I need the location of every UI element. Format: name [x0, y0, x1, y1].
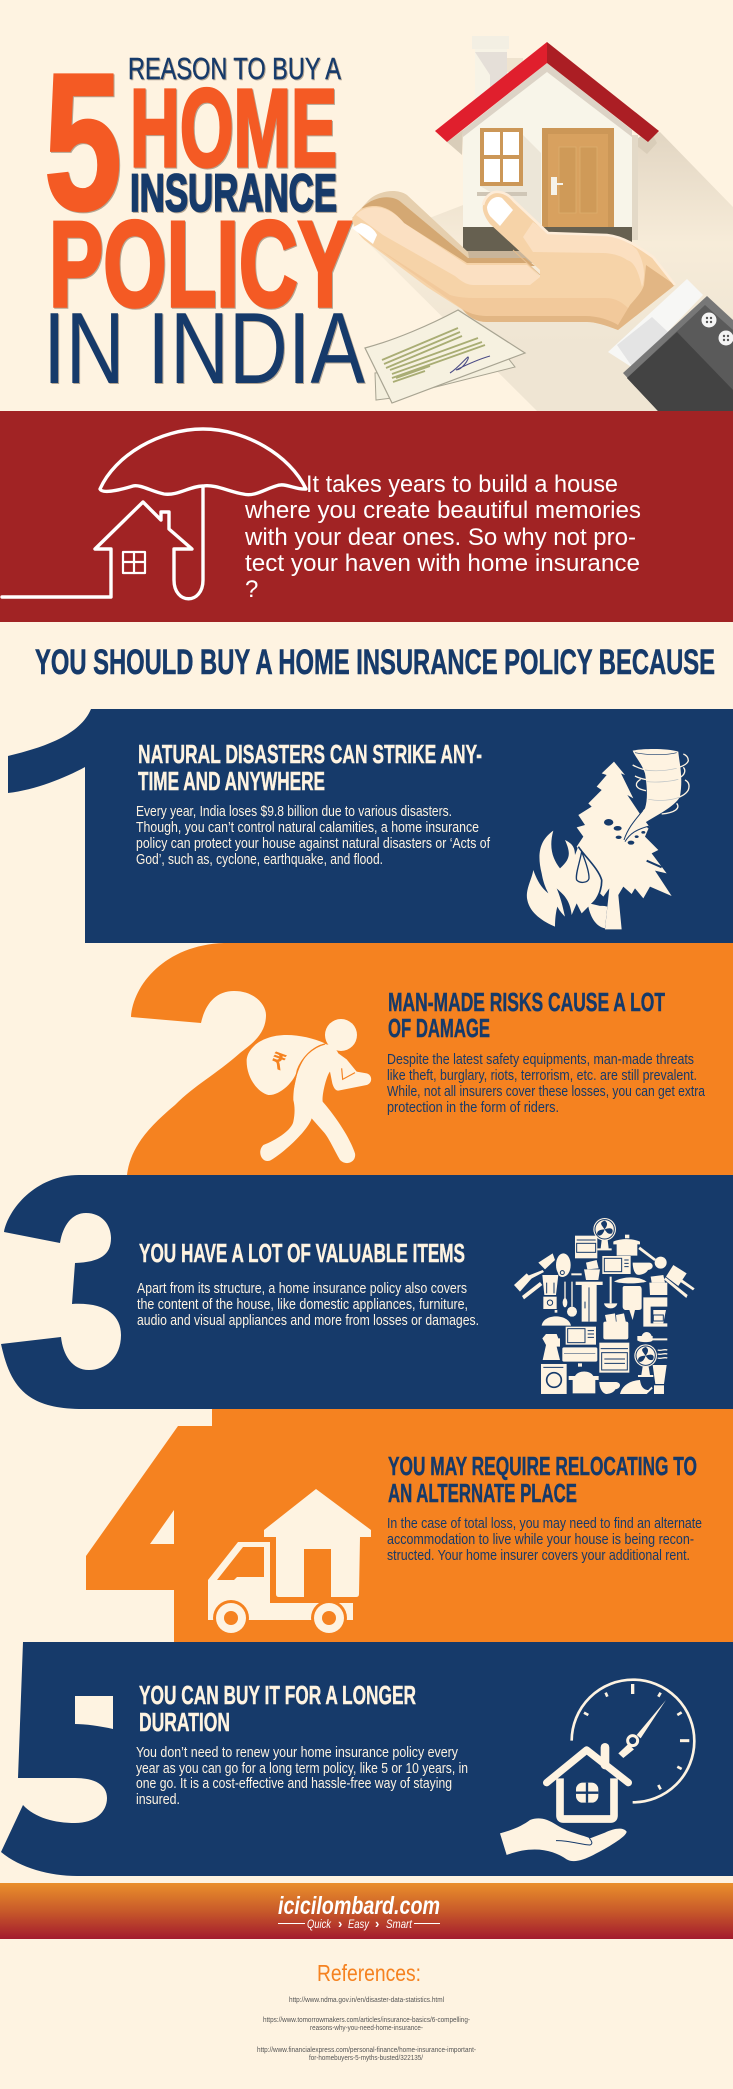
icon: signed document — [365, 310, 525, 403]
numeral panel 3 — [1, 1175, 733, 1409]
body 1: Every year, India loses $9.8 billion due to various disasters. — [136, 804, 452, 820]
icon: tree, fire and tornado — [527, 749, 689, 929]
body 5 — [136, 1745, 468, 1808]
references list: reasons-why-you-need-home-insurance- — [310, 2023, 423, 2032]
body 3: Apart from its structure, a home insurance policy also covers — [137, 1281, 467, 1297]
heading 2 — [388, 987, 665, 1043]
icon: truck carrying a house — [208, 1489, 371, 1636]
icon: man carrying rupee sack — [247, 1019, 371, 1163]
intro text: It takes years to build a house — [306, 471, 618, 498]
tagline: Easy — [348, 1919, 370, 1931]
panel: reason 3 — [1, 1175, 733, 1409]
panel: reason 2 — [127, 943, 733, 1175]
long shadow behind house and hand — [367, 132, 733, 411]
tagline: › — [338, 1916, 342, 1931]
heading 4: AN ALTERNATE PLACE — [388, 1478, 577, 1508]
heading 5: DURATION — [139, 1707, 230, 1737]
body 5: insured. — [136, 1792, 180, 1808]
title: REASON TO BUY A — [128, 52, 341, 86]
icon: shirt cuff — [608, 279, 703, 368]
icon: house — [435, 42, 659, 263]
references list: https://www.tomorrowmakers.com/articles/insurance-basics/6-compelling- — [263, 2015, 470, 2024]
logo text: icicilombard.com — [278, 1892, 440, 1920]
numeral panel 2 — [127, 943, 733, 1175]
references heading: References: — [317, 1960, 421, 1986]
tagline — [278, 1916, 440, 1931]
icon: umbrella over house outline — [2, 429, 306, 599]
body 4: accommodation to live while your house is being recon- — [387, 1532, 694, 1548]
tagline: Smart — [386, 1919, 413, 1931]
title: IN INDIA — [43, 293, 366, 405]
numeral panel 5 — [1, 1642, 733, 1876]
body 1 — [136, 804, 491, 868]
numeral panel 4 — [86, 1409, 733, 1642]
heading 3: YOU HAVE A LOT OF VALUABLE ITEMS — [139, 1238, 465, 1268]
body 3: audio and visual appliances and more from losses or damages. — [137, 1313, 479, 1329]
title: 5 — [44, 33, 122, 251]
icon: hand — [352, 191, 675, 330]
body 3: the content of the house, like domestic appliances, furniture, — [137, 1297, 468, 1313]
icon: house made of appliances — [514, 1218, 695, 1394]
heading 5 — [139, 1680, 416, 1737]
body 1: Though, you can’t control natural calamities, a home insurance — [136, 820, 479, 836]
body 5: You don’t need to renew your home insurance policy every — [136, 1745, 459, 1761]
icon: man carrying rupee sack: ₹ — [268, 1048, 289, 1075]
body 1: God’, such as, cyclone, earthquake, and flood. — [136, 852, 383, 868]
body 5: one go. It is a cost-effective and hassle-free way of staying — [136, 1776, 452, 1792]
icon: jacket sleeve — [623, 296, 733, 411]
icon: clock, house and hand — [500, 1680, 694, 1861]
thumbnail — [487, 197, 513, 226]
panel: intro band — [0, 411, 733, 622]
panel: reason 5 — [1, 1642, 733, 1876]
window — [480, 128, 523, 186]
references list: for-homebuyers-5-myths-busted/322135/ — [309, 2053, 424, 2062]
intro text: where you create beautiful memories — [244, 497, 641, 524]
roof — [435, 42, 547, 142]
door — [542, 128, 614, 227]
fingernail — [352, 223, 377, 244]
references list: http://www.financialexpress.com/personal-finance/home-insurance-important- — [257, 2045, 476, 2054]
body 3 — [137, 1281, 479, 1329]
panel: reason 4 — [86, 1409, 733, 1642]
heading 4 — [388, 1451, 697, 1508]
title: POLICY — [49, 196, 352, 332]
intro text — [244, 471, 641, 603]
body 4 — [387, 1516, 702, 1564]
heading 1: NATURAL DISASTERS CAN STRIKE ANY- — [138, 739, 482, 769]
illustration: house held in a hand — [352, 36, 733, 411]
intro text: with your dear ones. So why not pro- — [244, 524, 636, 551]
references list: http://www.ndma.gov.in/en/disaster-data-statistics.html — [289, 1995, 444, 2004]
intro text: ? — [245, 576, 258, 603]
icon: chimney — [472, 36, 523, 99]
body 1: policy can protect your house against natural disasters or ‘Acts of — [136, 836, 491, 852]
title: INSURANCE — [130, 164, 337, 223]
heading 5: YOU CAN BUY IT FOR A LONGER — [139, 1680, 416, 1710]
footer banner — [0, 1883, 733, 1939]
numeral 5 cut-out — [75, 1696, 113, 1729]
body 2 — [387, 1052, 706, 1116]
title — [43, 33, 366, 405]
tagline: Quick — [307, 1919, 332, 1931]
intro text: tect your haven with home insurance — [245, 550, 640, 577]
title: HOME — [130, 67, 337, 190]
heading 1: TIME AND ANYWHERE — [138, 766, 325, 796]
panel: reason 1 — [8, 709, 733, 943]
body 4: structed. Your home insurer covers your additional rent. — [387, 1548, 690, 1564]
tagline: › — [375, 1916, 379, 1931]
body 5: year as you can go for a long term policy, like 5 or 10 years, in — [136, 1761, 468, 1777]
body 2: protection in the form of riders. — [387, 1100, 559, 1116]
references list — [257, 1995, 476, 2062]
heading 2: OF DAMAGE — [388, 1013, 490, 1043]
numeral panel 1 — [8, 709, 733, 943]
heading 1 — [138, 739, 482, 796]
